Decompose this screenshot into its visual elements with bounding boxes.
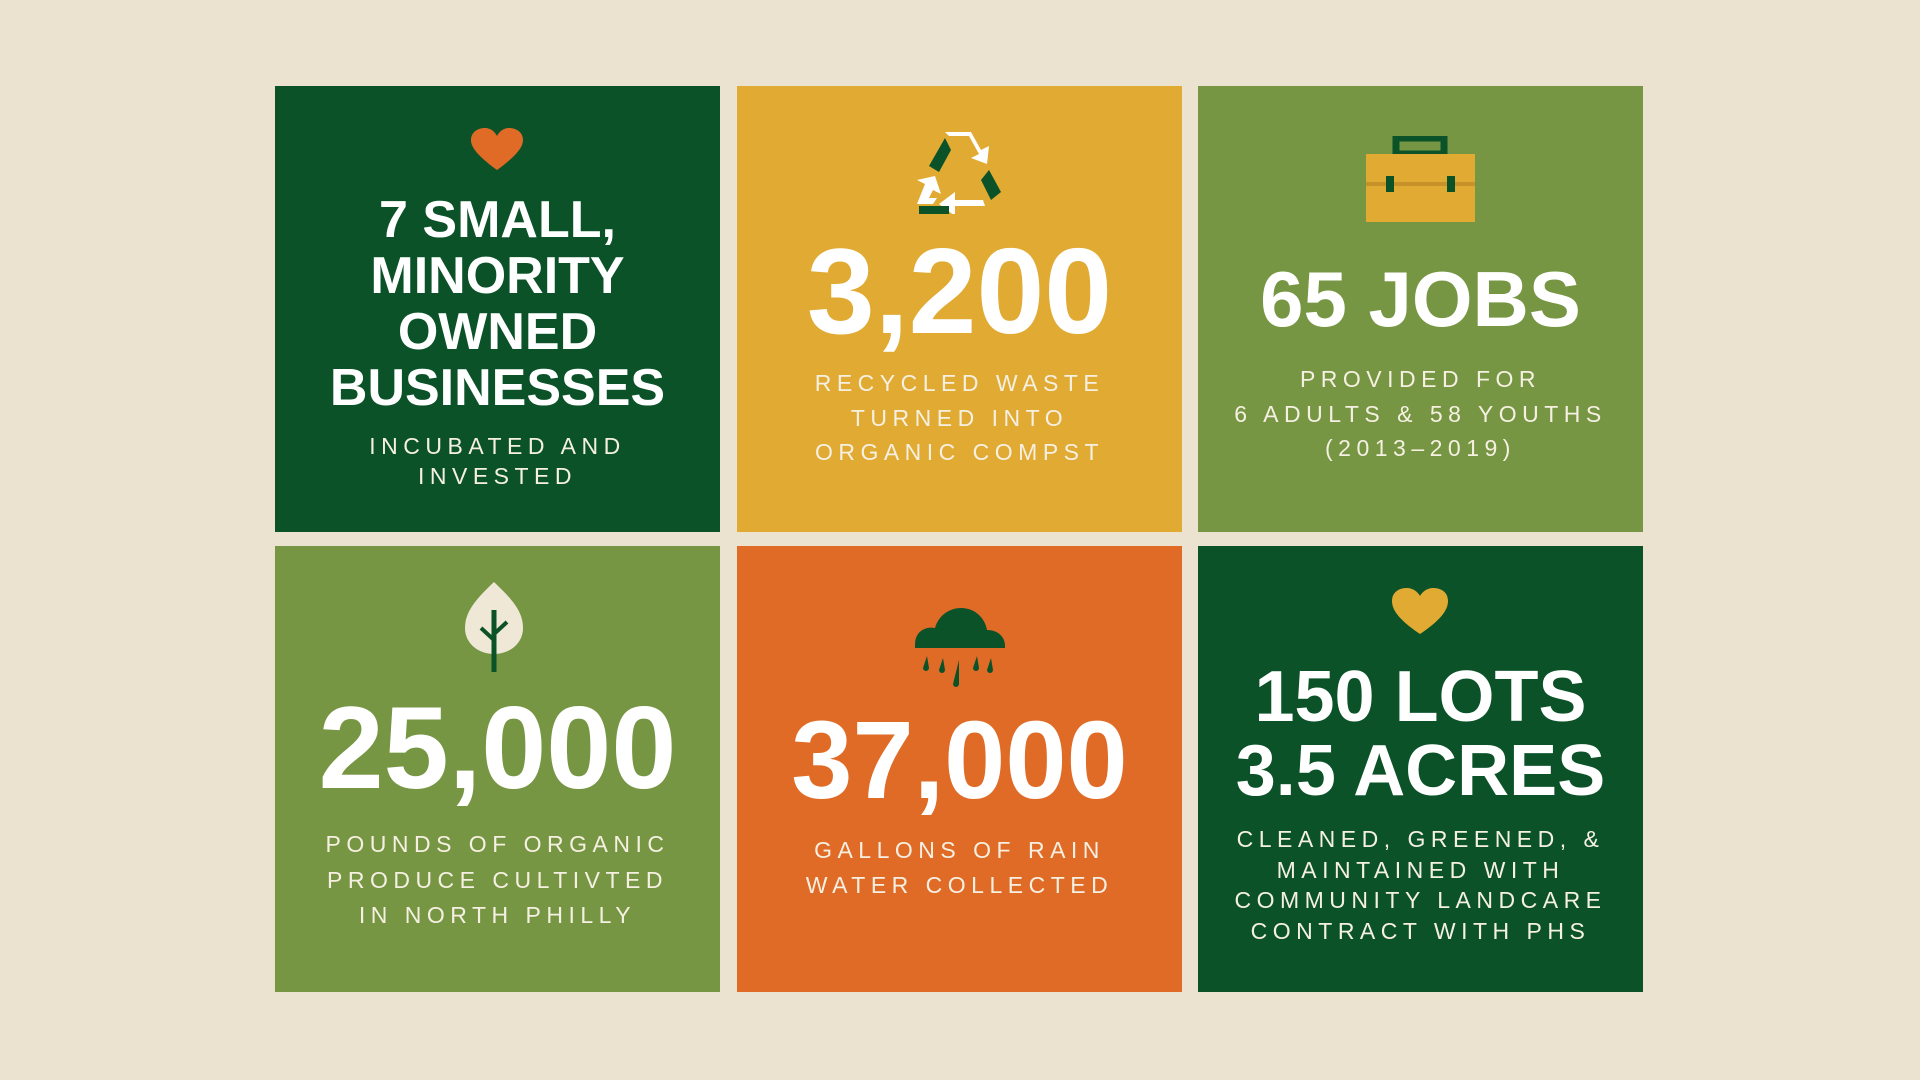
- panel: rain water: [737, 546, 1182, 992]
- number: 37,000: 37,000: [791, 699, 1128, 822]
- text: recycled waste turned into organic compst: TURNED INTO: [851, 404, 1068, 430]
- text: incubated and invested: INVESTED: [418, 463, 577, 489]
- title: 7 small minority owned businesses: OWNED: [398, 303, 597, 361]
- number: 3,200: 3,200: [807, 223, 1112, 359]
- text: gallons of rain water collected: WATER COLLECTED: [806, 872, 1113, 898]
- icon: heart orange: [471, 128, 523, 170]
- text: incubated and invested: INCUBATED AND: [369, 433, 626, 459]
- text: pounds of organic produce: POUNDS OF ORGANIC: [326, 831, 669, 857]
- text: cleaned greened maintained: CONTRACT WITH PHS: [1251, 918, 1590, 944]
- text: cleaned greened maintained: COMMUNITY LANDCARE: [1234, 887, 1607, 913]
- panel: businesses: [275, 86, 720, 532]
- icon: heart yellow: [1392, 588, 1448, 634]
- text: incubated and invested: [369, 433, 626, 489]
- icon: recycle: [917, 132, 1001, 214]
- text: cleaned greened maintained: MAINTAINED WITH: [1277, 856, 1564, 882]
- text: provided for adults and youths: (2013–2019): [1325, 435, 1516, 461]
- text: provided for adults and youths: 6 ADULTS & 58 YOUTHS: [1234, 400, 1607, 426]
- text: provided for adults and youths: PROVIDED FOR: [1300, 366, 1541, 392]
- panel: recycled waste: [737, 86, 1182, 532]
- number: 65 jobs: 65 JOBS: [1260, 255, 1581, 343]
- text: recycled waste turned into organic compst: ORGANIC COMPST: [815, 439, 1104, 465]
- text: recycled waste turned into organic compst: [815, 370, 1104, 465]
- text: pounds of organic produce: [326, 831, 669, 928]
- title: 150 lots 3.5 acres: 3.5 ACRES: [1236, 731, 1605, 811]
- title: 7 small minority owned businesses: [330, 191, 665, 417]
- icon: leaf: [465, 582, 523, 672]
- text: gallons of rain water collected: GALLONS OF RAIN: [814, 837, 1105, 863]
- text: recycled waste turned into organic compst: RECYCLED WASTE: [815, 370, 1104, 396]
- title: 7 small minority owned businesses: 7 SMALL,: [379, 191, 616, 249]
- icon: toolbox: [1366, 136, 1475, 222]
- text: gallons of rain water collected: [806, 837, 1113, 898]
- title: 150 lots 3.5 acres: 150 LOTS: [1254, 657, 1587, 737]
- title: 7 small minority owned businesses: MINORITY: [370, 247, 625, 305]
- panel: jobs: [1198, 86, 1643, 532]
- title: 7 small minority owned businesses: BUSINESSES: [330, 359, 665, 417]
- text: pounds of organic produce: PRODUCE CULTIVTED: [327, 866, 668, 892]
- number: 25,000: 25,000: [319, 682, 676, 813]
- title: 150 lots 3.5 acres: [1236, 657, 1605, 811]
- text: pounds of organic produce: IN NORTH PHILLY: [359, 902, 636, 928]
- text: cleaned greened maintained: CLEANED, GREENED, &: [1237, 826, 1604, 852]
- icon: rain cloud: [915, 608, 1005, 687]
- panel: lots and acres: [1198, 546, 1643, 992]
- text: provided for adults and youths: [1234, 366, 1607, 461]
- panel: organic produce: [275, 546, 720, 992]
- text: cleaned greened maintained: [1234, 826, 1607, 944]
